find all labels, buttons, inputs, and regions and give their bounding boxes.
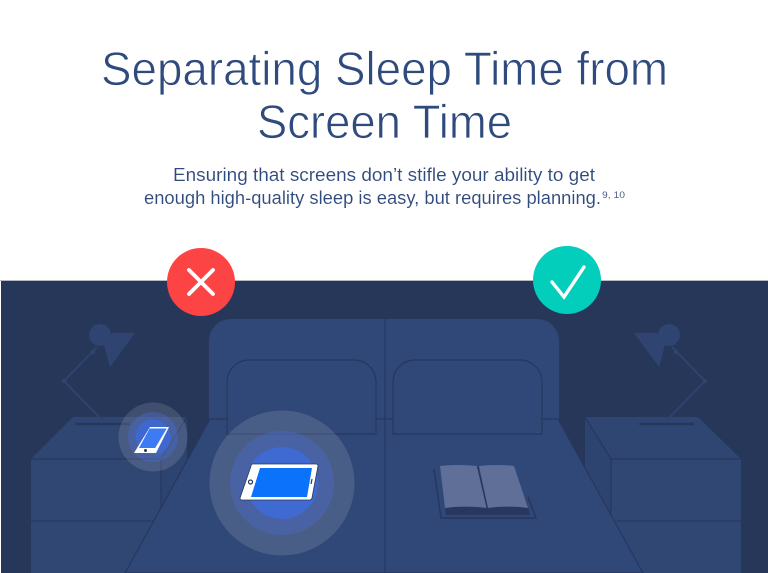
bed centre line	[384, 319, 386, 573]
room background	[1, 281, 768, 573]
icon: teal check badge	[533, 246, 601, 314]
left nightstand	[31, 417, 187, 573]
title	[101, 42, 668, 148]
subtitle	[144, 165, 625, 208]
subtitle: 9, 10	[602, 190, 625, 201]
subtitle: enough high-quality sleep is easy, but requires planning.	[144, 188, 601, 208]
book	[434, 465, 536, 518]
bed	[125, 319, 643, 573]
left lamp	[62, 324, 135, 426]
right nightstand	[585, 417, 741, 573]
subtitle: Ensuring that screens don’t stifle your ability to get	[173, 165, 595, 185]
right lamp	[634, 324, 707, 426]
title: Separating Sleep Time from	[101, 42, 668, 95]
tablet with glow	[210, 410, 354, 556]
icon: red cross badge	[167, 248, 235, 316]
headboard	[209, 319, 559, 425]
top edge of room	[0, 280, 768, 281]
mattress	[125, 419, 643, 573]
bedroom scene	[0, 280, 768, 573]
title: Screen Time	[257, 95, 512, 148]
left pillow	[227, 360, 376, 434]
right pillow	[393, 360, 542, 434]
phone with glow	[118, 402, 188, 472]
